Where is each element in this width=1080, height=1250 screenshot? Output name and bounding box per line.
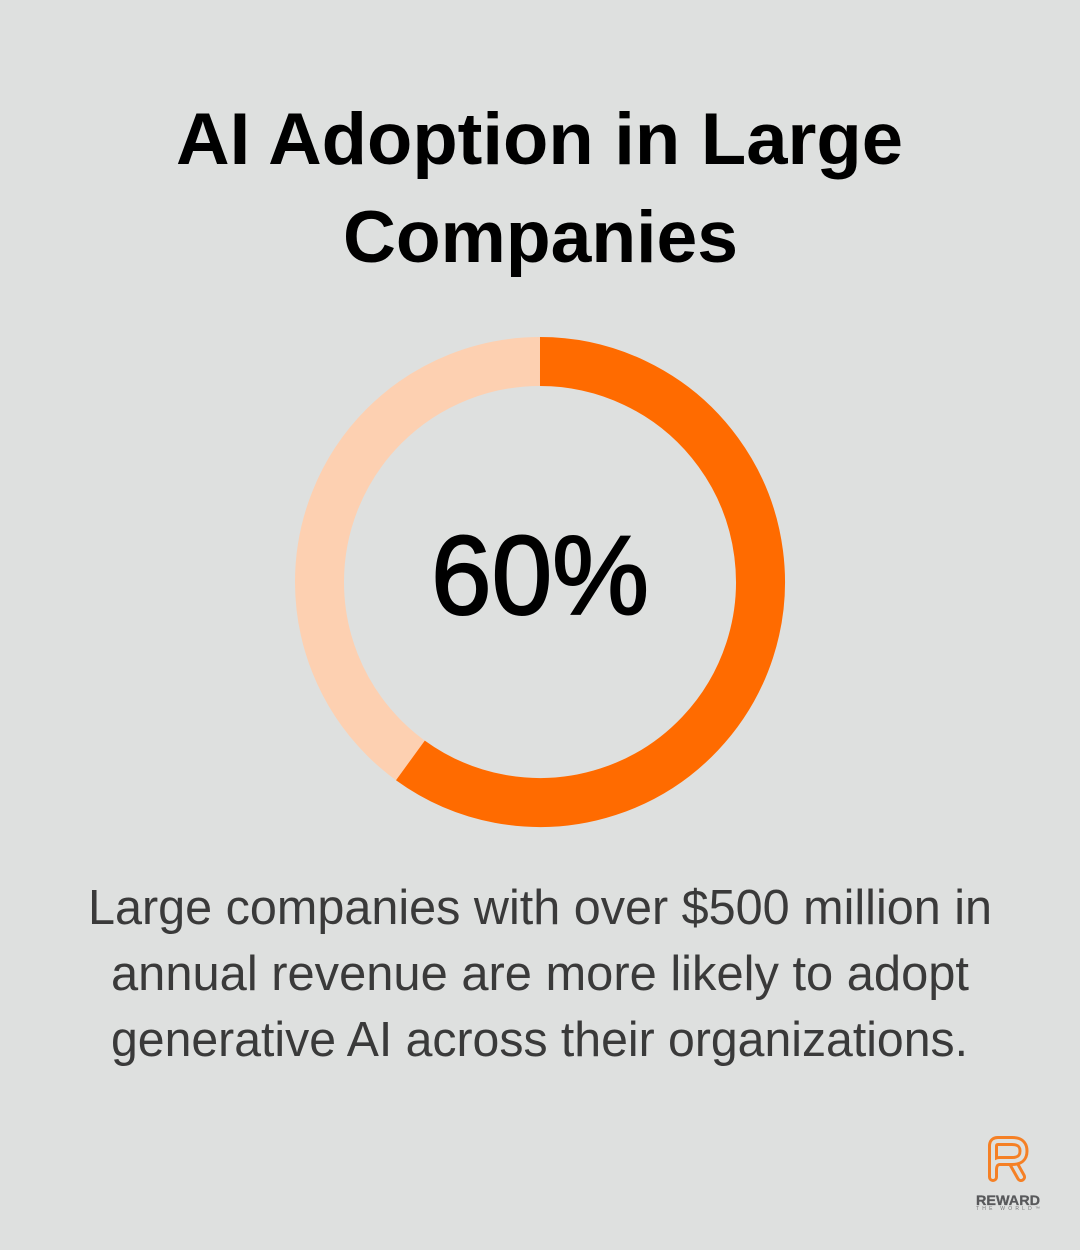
logo tagline: THE WORLD™ bbox=[976, 1206, 1040, 1212]
logo: Reward the World bbox=[976, 1141, 1040, 1212]
icon: R mark bbox=[993, 1141, 1024, 1177]
description text bbox=[88, 881, 992, 1067]
donut chart: 60% bbox=[320, 362, 760, 802]
description text: annual revenue are more likely to adopt bbox=[111, 947, 969, 1001]
title: Companies bbox=[343, 197, 738, 278]
title bbox=[176, 99, 903, 278]
title: AI Adoption in Large bbox=[176, 99, 903, 180]
logo wordmark: REWARD bbox=[976, 1192, 1040, 1208]
description text: generative AI across their organizations. bbox=[111, 1013, 968, 1067]
description text: Large companies with over $500 million in bbox=[88, 881, 992, 935]
donut value: 60% bbox=[431, 513, 649, 638]
